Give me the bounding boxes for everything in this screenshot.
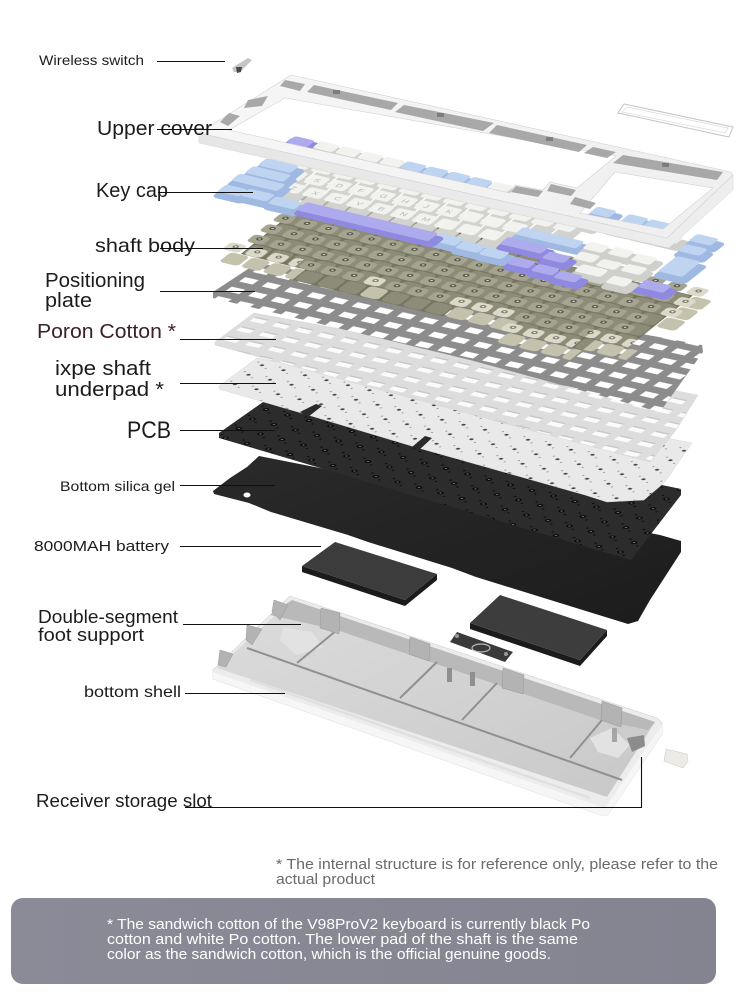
PCB bbox=[219, 402, 681, 560]
keycaps bbox=[204, 133, 742, 309]
letter legends: ZXCVBNM bbox=[288, 185, 433, 223]
ixpe shaft underpad bbox=[219, 358, 692, 502]
arrows and right column bbox=[497, 206, 738, 309]
reference note: * The internal structure is for reference only, please refer to the bbox=[276, 857, 718, 873]
label: shaft body: shaft body bbox=[95, 235, 195, 257]
battery right bbox=[470, 595, 607, 666]
label: Double-segment foot support: foot support bbox=[38, 625, 144, 645]
icon: wireless switch part bbox=[232, 58, 252, 73]
label: Positioning plate: Positioning bbox=[45, 270, 145, 292]
small circuit board bbox=[450, 632, 513, 662]
label: Poron Cotton: Poron Cotton * bbox=[37, 321, 176, 343]
label: PCB: PCB bbox=[127, 417, 171, 444]
label: Positioning plate bbox=[45, 270, 255, 312]
white alpha rows bbox=[241, 144, 614, 265]
upper cover frame bbox=[199, 75, 733, 248]
receiver dongle bbox=[664, 749, 688, 768]
panel: sandwich cotton note: color as the sandwich cotton, which is the official genuine goods. bbox=[107, 947, 551, 963]
bottom shell bbox=[213, 596, 662, 815]
panel: sandwich cotton note: cotton and white Po cotton. The lower pad of the shaft is the same bbox=[107, 932, 578, 948]
letter legends: ASDFGHJK bbox=[289, 172, 456, 215]
label: bottom shell: bottom shell bbox=[84, 684, 181, 701]
label: Receiver storage slot: Receiver storage slot bbox=[36, 791, 212, 811]
label: Upper cover: Upper cover bbox=[97, 118, 212, 140]
floating frame strip bbox=[618, 104, 733, 137]
label: Key cap: Key cap bbox=[96, 180, 168, 202]
label: ixpe shaft underpad: underpad * bbox=[55, 379, 164, 401]
shaft bodies bbox=[193, 188, 725, 374]
label: Double-segment foot support bbox=[38, 607, 301, 645]
label: Double-segment foot support: Double-segment bbox=[38, 607, 178, 627]
reference note: actual product bbox=[276, 872, 375, 888]
poron cotton bbox=[215, 313, 698, 462]
numpad bbox=[548, 221, 696, 295]
label: 8000MAH battery: 8000MAH battery bbox=[34, 538, 170, 555]
panel: sandwich cotton note: * The sandwich cotton of the V98ProV2 keyboard is currently black Po bbox=[107, 917, 590, 933]
label: ixpe shaft underpad bbox=[55, 358, 276, 401]
function row bbox=[280, 135, 682, 239]
label: Wireless switch: Wireless switch bbox=[39, 52, 144, 68]
positioning plate bbox=[213, 263, 703, 412]
silica gel sheet bbox=[213, 456, 681, 624]
spacebar and enter bbox=[291, 182, 595, 277]
label: Receiver storage slot bbox=[36, 757, 642, 811]
label: Bottom silica gel: Bottom silica gel bbox=[60, 478, 175, 494]
left blue modifiers bbox=[210, 157, 555, 267]
reference note bbox=[276, 857, 718, 888]
panel: sandwich cotton note bbox=[11, 898, 716, 984]
label: Positioning plate: plate bbox=[45, 290, 92, 312]
label: ixpe shaft underpad: ixpe shaft bbox=[55, 358, 151, 380]
battery left bbox=[302, 542, 437, 606]
